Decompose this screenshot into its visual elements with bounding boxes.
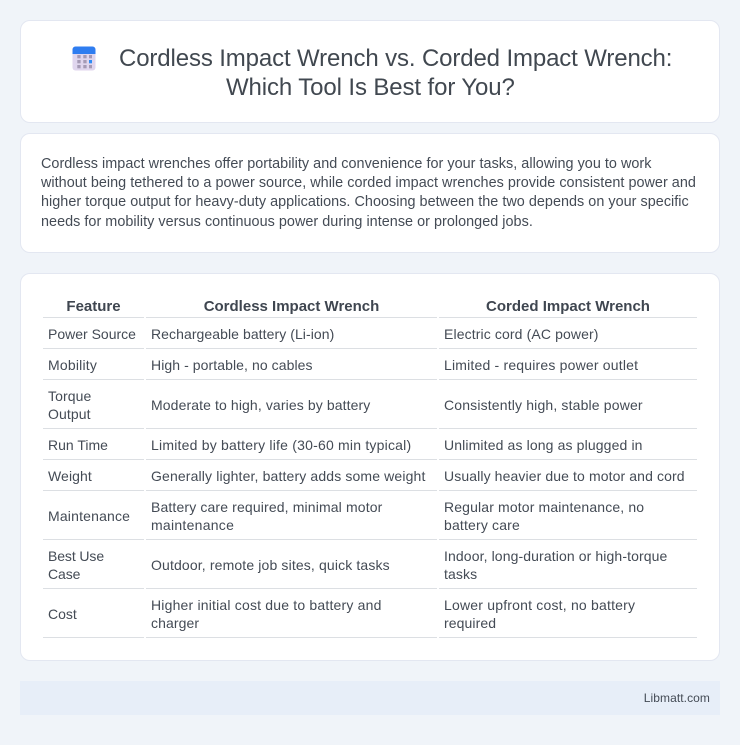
footer text: Libmatt.com (644, 691, 710, 705)
row: Mobility: Mobility (48, 357, 97, 373)
row: Power Source: Electric cord (AC power) (444, 326, 599, 342)
text block: introduction: without being tethered to a power source, while corded impact wrenches provide consistent power and (41, 175, 696, 191)
row: Cost: Higher initial cost due to battery and (151, 597, 382, 613)
row: Mobility: Limited - requires power outlet (444, 357, 638, 373)
row: Cost: Lower upfront cost, no battery (444, 597, 635, 613)
text block: introduction: Cordless impact wrenches offer portability and convenience for your tasks, allowing you to work (41, 156, 651, 172)
row: Weight: Usually heavier due to motor and cord (444, 468, 685, 484)
row: Power Source: Rechargeable battery (Li-ion) (151, 326, 334, 342)
row: Torque Output: Consistently high, stable power (444, 397, 643, 413)
row: Power Source: Power Source (48, 326, 136, 342)
table header: Cordless Impact Wrench: Cordless Impact Wrench (204, 298, 379, 315)
row: Cost: required (444, 615, 496, 631)
row: Best Use Case: tasks (444, 566, 477, 582)
row: Cost: charger (151, 615, 199, 631)
row: Torque Output: Output (48, 406, 91, 422)
row: Maintenance: maintenance (151, 517, 234, 533)
row: Run Time: Run Time (48, 437, 108, 453)
title (119, 45, 672, 101)
row: Power Source (48, 326, 599, 342)
row: Torque Output: Moderate to high, varies by battery (151, 397, 370, 413)
row: Maintenance: Maintenance (48, 508, 130, 524)
panel: introduction (20, 133, 720, 253)
footer bar (20, 681, 720, 715)
table header: Feature: Feature (66, 298, 121, 315)
row: Best Use Case: Best Use (48, 548, 104, 564)
row: Torque Output (48, 388, 643, 422)
title: Which Tool Is Best for You? (226, 74, 515, 101)
row: Torque Output: Torque (48, 388, 91, 404)
row: Cost (48, 597, 635, 631)
row: Maintenance (48, 499, 644, 533)
table header: Corded Impact Wrench: Corded Impact Wrench (486, 298, 650, 315)
row: Cost: Cost (48, 606, 77, 622)
text block: introduction: higher torque output for heavy-duty applications. Choosing between the two depends on your specific (41, 194, 689, 210)
row: Maintenance: Battery care required, minimal motor (151, 499, 382, 515)
title: Cordless Impact Wrench vs. Corded Impact Wrench: (119, 45, 672, 72)
row: Run Time (48, 437, 643, 453)
row: Weight (48, 468, 685, 484)
row: Weight: Weight (48, 468, 92, 484)
panel: title header (20, 20, 720, 123)
row: Best Use Case (48, 548, 667, 582)
row: Best Use Case: Case (48, 566, 80, 582)
row: Maintenance: battery care (444, 517, 520, 533)
text block: introduction (41, 156, 696, 230)
text block: introduction: needs for mobility versus continuous power during intense or prolonged jobs. (41, 214, 533, 230)
row: Best Use Case: Outdoor, remote job sites, quick tasks (151, 557, 390, 573)
row: Mobility (48, 357, 638, 373)
row: Mobility: High - portable, no cables (151, 357, 313, 373)
row: Maintenance: Regular motor maintenance, no (444, 499, 644, 515)
row: Run Time: Limited by battery life (30-60 min typical) (151, 437, 411, 453)
row: Weight: Generally lighter, battery adds some weight (151, 468, 426, 484)
panel: comparison table (20, 273, 720, 661)
row: Run Time: Unlimited as long as plugged in (444, 437, 643, 453)
row: Best Use Case: Indoor, long-duration or high-torque (444, 548, 667, 564)
icon: calendar (72, 46, 96, 70)
